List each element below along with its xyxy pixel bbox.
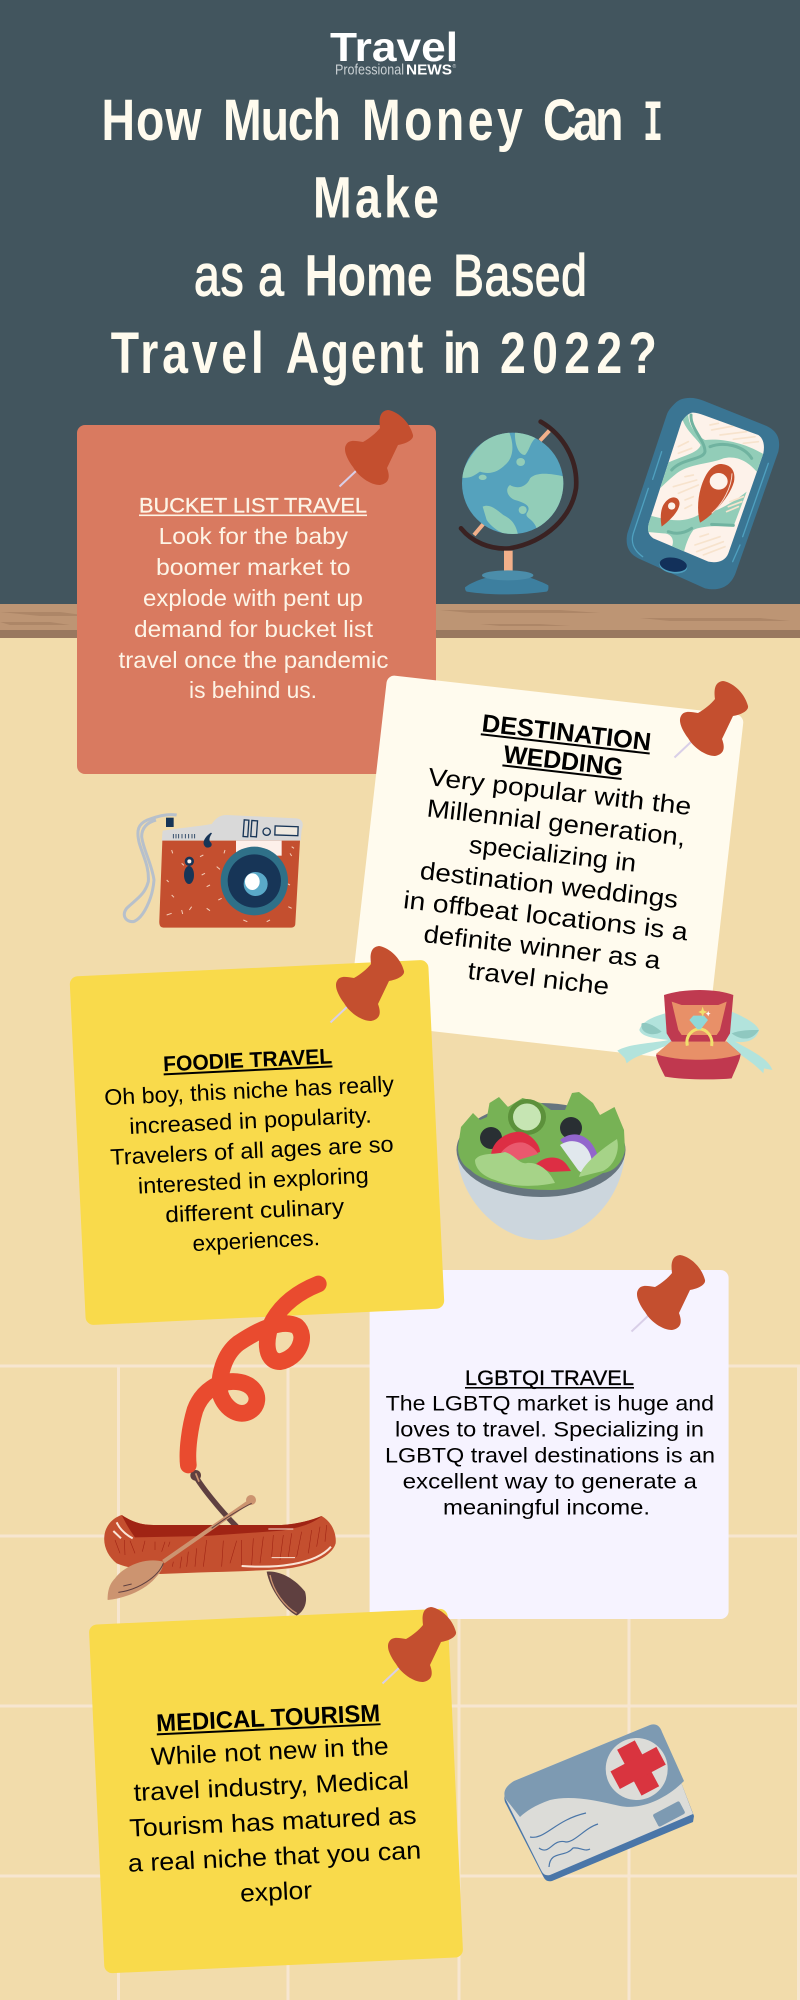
panel: lgbtqi travel bbox=[370, 1270, 729, 1619]
text: destination wedding body: travel niche bbox=[466, 957, 611, 1001]
text: bucket list body: explode with pent up bbox=[143, 585, 363, 611]
title: Based bbox=[453, 244, 587, 309]
text: medical tourism body: While not new in the bbox=[150, 1732, 389, 1771]
panel: bucket list travel bbox=[77, 425, 436, 774]
text: foodie body: interested in exploring bbox=[137, 1163, 369, 1199]
text: lgbtqi body: LGBTQ travel destinations is an bbox=[385, 1444, 715, 1468]
title: Travel bbox=[111, 321, 264, 386]
text: destination wedding body: Millennial generation, bbox=[425, 795, 687, 852]
text: medical tourism body: a real niche that you can bbox=[127, 1836, 422, 1878]
title: Agent bbox=[286, 321, 423, 386]
title: Can bbox=[543, 88, 623, 153]
icon: push pin on medical card bbox=[382, 1607, 456, 1684]
text: bucket list body: boomer market to bbox=[156, 554, 350, 580]
text: lgbtqi body: loves to travel. Specializing in bbox=[395, 1418, 704, 1442]
title bbox=[102, 88, 663, 386]
text: foodie body bbox=[104, 1071, 402, 1260]
title: as a bbox=[194, 244, 285, 309]
icon: salad bowl bbox=[456, 1092, 626, 1240]
text: destination wedding body: specializing in bbox=[468, 831, 638, 878]
text: medical tourism body: travel industry, Medical bbox=[133, 1766, 410, 1807]
text: destination wedding body bbox=[395, 762, 704, 1009]
text: medical tourism body bbox=[122, 1731, 423, 1913]
text: bucket list body: demand for bucket list bbox=[134, 616, 373, 642]
icon: ring box with ribbon bbox=[617, 990, 772, 1079]
title: How bbox=[102, 88, 202, 153]
title: Money bbox=[362, 88, 523, 153]
text: lgbtqi body: The LGBTQ market is huge and bbox=[386, 1392, 714, 1416]
text: bucket list body: Look for the baby bbox=[159, 523, 348, 549]
icon: canoe with paddles and squiggle bbox=[104, 1284, 336, 1616]
icon: squiggle bbox=[188, 1284, 318, 1465]
icon: push pin on destination card bbox=[674, 681, 748, 758]
logo: Travel Professional News: NEWS bbox=[406, 62, 452, 78]
icon: push pin on lgbtqi card bbox=[632, 1255, 705, 1332]
text: bucket list body bbox=[118, 523, 389, 703]
logo: Travel Professional News: Professional bbox=[335, 62, 404, 78]
heading: lgbtqi travel: LGBTQI TRAVEL bbox=[465, 1367, 634, 1390]
wooden shelf bbox=[0, 604, 800, 638]
text: lgbtqi body bbox=[385, 1392, 715, 1520]
title: in bbox=[443, 321, 481, 386]
title: Home bbox=[305, 244, 433, 309]
panel: medical tourism bbox=[89, 1609, 463, 1973]
text: bucket list body: travel once the pandemic bbox=[118, 647, 389, 673]
text: medical tourism body: Tourism has matured as bbox=[129, 1802, 417, 1843]
title: I bbox=[643, 93, 663, 158]
heading: destination wedding: DESTINATION bbox=[480, 709, 653, 756]
text: bucket list body: is behind us. bbox=[189, 677, 317, 703]
heading: destination wedding bbox=[477, 709, 653, 785]
heading: bucket list travel: BUCKET LIST TRAVEL bbox=[139, 494, 367, 518]
icon: medical insurance card bbox=[504, 1724, 694, 1881]
logo: Travel Professional News: ® bbox=[452, 63, 456, 70]
chalkboard background bbox=[0, 0, 800, 604]
icon: phone with map bbox=[627, 398, 779, 589]
icon: globe bbox=[461, 422, 576, 594]
text: lgbtqi body: meaningful income. bbox=[443, 1496, 650, 1520]
heading: destination wedding: WEDDING bbox=[502, 741, 624, 782]
text: destination wedding body: in offbeat locations is a bbox=[402, 886, 689, 946]
panel: destination wedding bbox=[348, 675, 744, 1062]
text: medical tourism body: explor bbox=[239, 1876, 313, 1908]
text: lgbtqi body: excellent way to generate a bbox=[403, 1470, 697, 1494]
text: foodie body: different culinary bbox=[165, 1194, 345, 1227]
heading: medical tourism: MEDICAL TOURISM bbox=[156, 1700, 381, 1737]
text: foodie body: increased in popularity. bbox=[129, 1103, 372, 1139]
icon: push pin on foodie card bbox=[330, 946, 404, 1022]
text: foodie body: Oh boy, this niche has really bbox=[104, 1071, 395, 1110]
title: Make bbox=[313, 166, 439, 231]
title: Much bbox=[223, 88, 341, 153]
text: destination wedding body: Very popular with the bbox=[427, 763, 693, 821]
panel: foodie travel bbox=[69, 960, 445, 1325]
text: foodie body: Travelers of all ages are so bbox=[110, 1132, 394, 1170]
icon: camera bbox=[124, 815, 303, 928]
text: destination wedding body: destination weddings bbox=[419, 857, 680, 914]
title: 2022? bbox=[500, 321, 657, 386]
icon: push pin on bucket list card bbox=[340, 410, 413, 486]
logo: Travel Professional News: Travel bbox=[330, 24, 458, 70]
text: destination wedding body: definite winner as a bbox=[422, 920, 662, 975]
heading: foodie travel: FOODIE TRAVEL bbox=[163, 1044, 333, 1076]
text: foodie body: experiences. bbox=[192, 1225, 320, 1256]
